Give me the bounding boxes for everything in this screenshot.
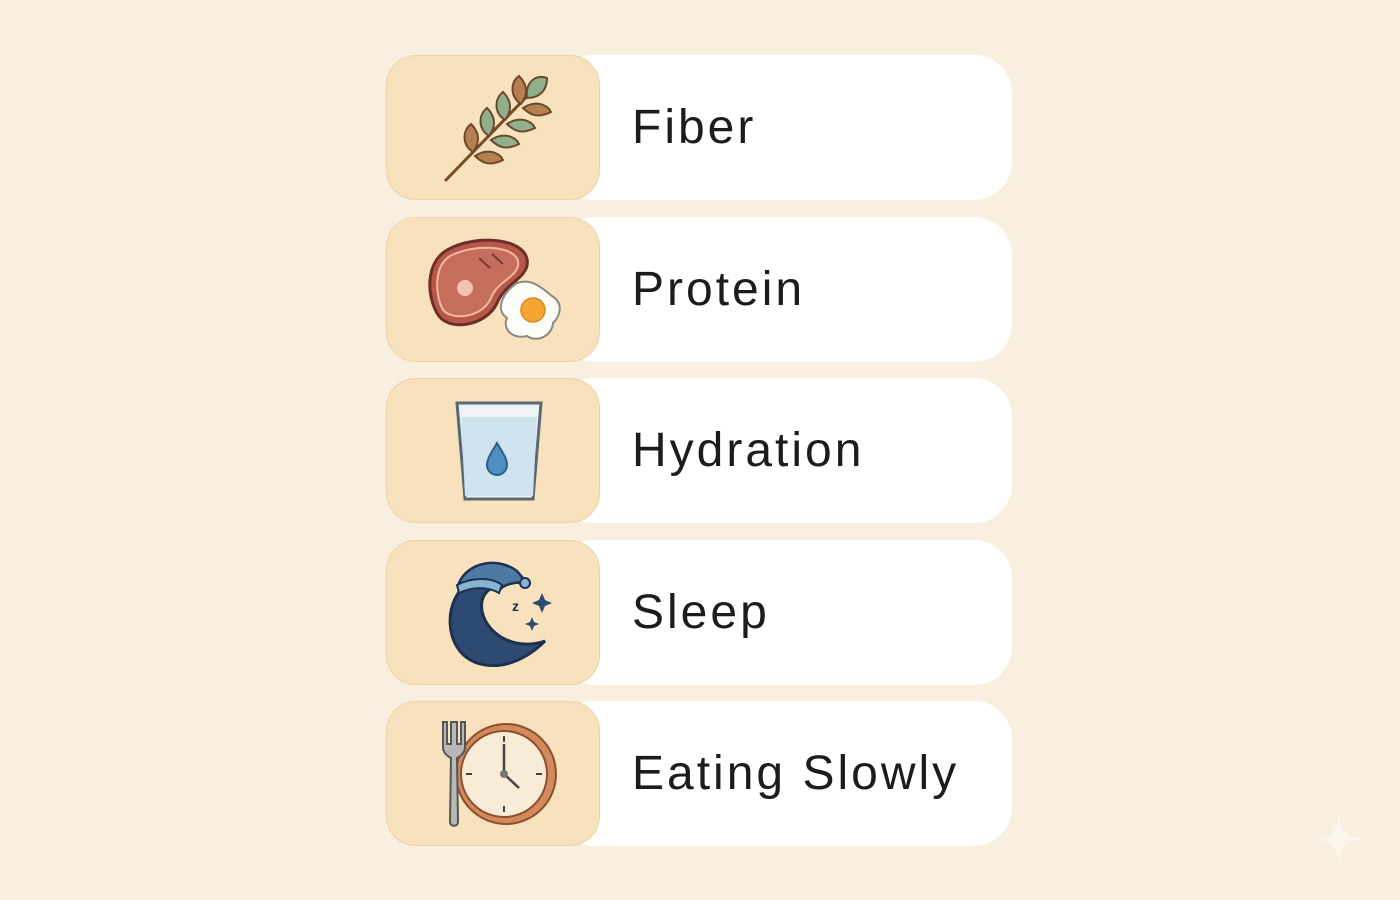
row: Eating Slowly (386, 701, 1012, 846)
label: Fiber: Fiber (632, 101, 756, 154)
label: Eating Slowly: Eating Slowly (632, 747, 959, 800)
icon: sparkle (1316, 816, 1362, 862)
icon: water glass (386, 378, 600, 523)
label: Protein: Protein (632, 263, 805, 316)
label: Sleep: Sleep (632, 586, 770, 639)
row: Sleep (386, 540, 1012, 685)
row: Hydration (386, 378, 1012, 523)
row: Protein (386, 217, 1012, 362)
label: Hydration: Hydration (632, 424, 864, 477)
row: Fiber (386, 55, 1012, 200)
icon: steak and egg (386, 217, 600, 362)
icon: sleeping moon (386, 540, 600, 685)
icon: sleeping moon: z (512, 598, 519, 614)
icon: wheat (386, 55, 600, 200)
icon: fork and clock (386, 701, 600, 846)
